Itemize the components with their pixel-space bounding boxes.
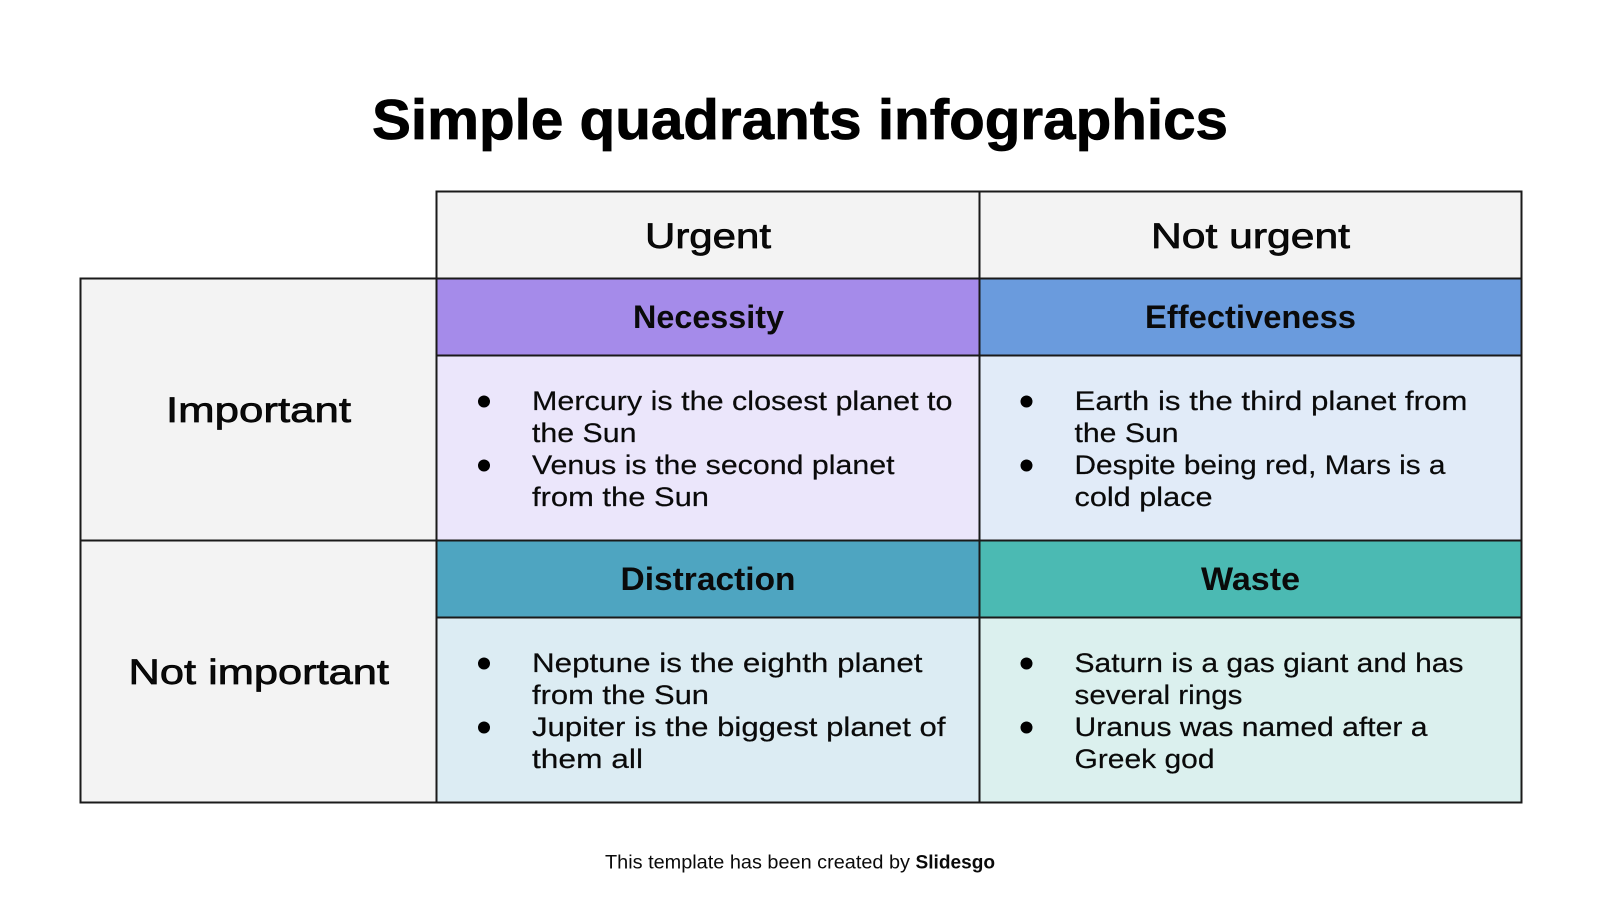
column header: Not urgent	[980, 192, 1522, 278]
heading: Distraction: Distraction	[620, 561, 796, 597]
heading: Distraction	[436, 540, 980, 618]
column header: Not urgent: Not urgent	[1151, 216, 1350, 256]
bullet list: Necessity: the Sun	[532, 418, 636, 448]
bullet list: Waste: Saturn is a gas giant and has	[1074, 648, 1464, 678]
heading: Waste	[980, 540, 1522, 618]
panel: Distraction	[436, 540, 980, 802]
bullet list: Distraction: Neptune is the eighth planet	[532, 648, 923, 678]
quadrant matrix	[80, 192, 1522, 802]
bullet list: Effectiveness: Earth is the third planet from	[1074, 386, 1468, 416]
heading: Necessity	[436, 278, 980, 356]
bullet list: Necessity	[436, 356, 980, 540]
title: Simple quadrants infographics	[372, 88, 1228, 152]
row header: Important	[80, 278, 436, 540]
panel: Waste	[980, 540, 1522, 802]
row header: Not important: Not important	[128, 652, 389, 692]
bullet list: Necessity: Mercury is the closest planet to	[532, 386, 952, 416]
row header: Not important	[80, 540, 436, 802]
bullet list: Effectiveness: Despite being red, Mars is a	[1074, 450, 1447, 480]
bullet list: Waste	[980, 618, 1522, 802]
heading: Effectiveness: Effectiveness	[1145, 299, 1356, 335]
footer credit: This template has been created by	[605, 852, 911, 874]
bullet list: Waste: Greek god	[1074, 744, 1214, 774]
bullet list: Waste: Uranus was named after a	[1074, 712, 1429, 742]
footer credit: Slidesgo	[916, 852, 995, 874]
bullet list: Distraction: from the Sun	[532, 680, 709, 710]
bullet list: Distraction	[436, 618, 980, 802]
bullet list: Effectiveness: the Sun	[1074, 418, 1178, 448]
bullet list: Waste: several rings	[1074, 680, 1242, 710]
bullet list: Necessity: from the Sun	[532, 482, 709, 512]
panel: Necessity	[436, 278, 980, 540]
bullet list: Distraction: them all	[532, 744, 643, 774]
column header: Urgent	[436, 192, 980, 278]
column header: Urgent: Urgent	[645, 216, 771, 256]
row header: Important: Important	[166, 390, 351, 430]
heading: Necessity: Necessity	[633, 299, 784, 335]
bullet list: Effectiveness	[980, 356, 1522, 540]
heading: Effectiveness	[980, 278, 1522, 356]
bullet list: Distraction: Jupiter is the biggest planet of	[532, 712, 946, 742]
bullet list: Effectiveness: cold place	[1074, 482, 1212, 512]
bullet list: Necessity: Venus is the second planet	[532, 450, 895, 480]
panel: Effectiveness	[980, 278, 1522, 540]
heading: Waste: Waste	[1201, 561, 1300, 597]
